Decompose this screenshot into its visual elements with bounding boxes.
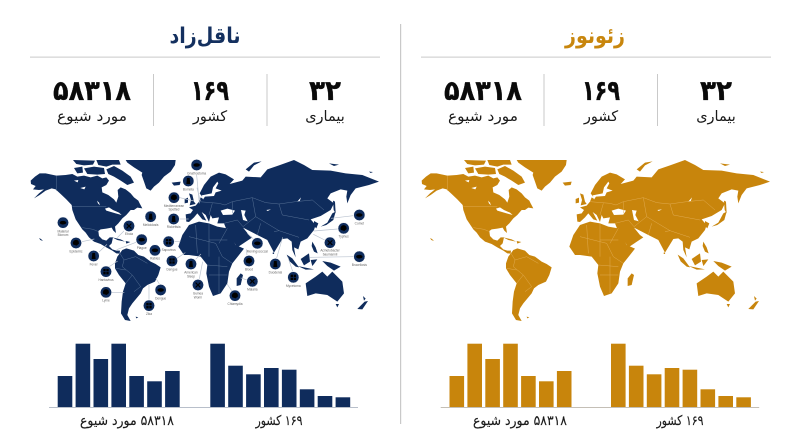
chart caption: countries zoonoses: ۱۶۹ کشور [656, 413, 704, 429]
icon: zika [143, 285, 155, 316]
icon: hantavirus: Hantavirus [98, 278, 114, 282]
icon: east 1 [331, 209, 365, 225]
heading rule right [421, 56, 771, 58]
icon: epidemic: Epidemic [70, 249, 83, 253]
icon: east 6 [243, 249, 255, 271]
icon: fever: Fever [90, 262, 98, 266]
bar chart: outbreaks zoonoses [450, 344, 572, 407]
chart baseline left [49, 407, 358, 408]
icon: lyme: Lyme [102, 299, 110, 303]
world map: zoonoses [422, 160, 770, 321]
stats: vectors: کشور [192, 109, 227, 125]
icon: east 10: Chlamydia [228, 302, 243, 306]
icon: lyme [100, 287, 124, 303]
icon: sapovirus: Sapovirus [162, 248, 176, 252]
icon: dengue: Dengue [166, 267, 178, 271]
center divider [400, 24, 401, 424]
icon: melioidosis [143, 211, 159, 227]
chart caption: outbreaks zoonoses: ۵۸۳۱۸ مورد شیوع [473, 413, 567, 429]
icon: east 3 [313, 234, 340, 257]
stats: zoonoses: ۱۶۹ [582, 74, 620, 107]
icon: malaria [57, 217, 69, 237]
icon: east 8 [286, 257, 301, 288]
stats: vectors: ۳۲ [309, 74, 341, 107]
icon: east 3: baumannii [323, 253, 338, 257]
chart baseline right [441, 407, 759, 408]
heading: zoonoses: زئونوز [564, 24, 625, 49]
icon: top [187, 159, 206, 203]
icon: epidemic [70, 237, 94, 253]
icon: dengue [166, 253, 185, 271]
icon: african sleep: American [184, 271, 198, 275]
icon: plague [117, 234, 147, 250]
icon: east 5 [247, 233, 268, 253]
icon: east 6: Blood [245, 267, 253, 271]
icon: east 4 [309, 251, 367, 267]
icon: east 4: Brucellosis [352, 263, 367, 267]
vector icons west [57, 159, 206, 316]
icon: guinea: Guinea [193, 291, 203, 295]
stats: zoonoses: مورد شیوع [448, 109, 518, 125]
icon: african sleep: Sleep [187, 274, 195, 278]
icon: mediterranean [164, 192, 194, 212]
stats: vectors: مورد شیوع [57, 109, 127, 125]
stats: vectors [53, 74, 345, 126]
icon: malaria: Malarial [57, 229, 69, 233]
icon: rickettsia: Rickettsia [167, 225, 181, 229]
icon: east 3: Acinetobacter [320, 249, 340, 253]
world map: vectors [31, 160, 379, 321]
icon: east 5: Meningococcal [247, 249, 268, 253]
icon: mediterranean: Mediterranean [164, 204, 184, 208]
icon: east 9 [241, 276, 258, 292]
panel: vectors [30, 24, 380, 429]
chart caption: outbreaks vectors: ۵۸۳۱۸ مورد شیوع [80, 413, 174, 429]
icon: dengue south: Dengue [155, 296, 166, 300]
panel: zoonoses [421, 24, 771, 429]
heading rule left [30, 56, 380, 58]
bar chart: countries vectors [210, 344, 350, 407]
stats: vectors: ۵۸۳۱۸ [53, 74, 131, 107]
icon: malaria: Bionom [58, 233, 69, 237]
icon: mediterranean: Spotted [169, 208, 180, 212]
icon: top: Gnathostoma [187, 171, 206, 175]
icon: dengue south [155, 278, 166, 300]
icon: east 9: Malaria [247, 288, 258, 292]
vector icons east [227, 209, 367, 306]
chart caption: countries vectors: ۱۶۹ کشور [255, 413, 302, 429]
bar chart: outbreaks vectors [58, 344, 180, 407]
icon: guinea: Worm [194, 295, 203, 299]
icon: east 7: Duodenal [269, 270, 282, 274]
icon: african sleep [184, 254, 201, 278]
icon: bovine [183, 175, 200, 201]
icon: east 2: Typhus [339, 235, 349, 239]
heading: vectors: ناقل‌زاد [170, 24, 240, 49]
icon: east 2 [314, 223, 349, 239]
stats: vectors: بیماری [305, 109, 345, 125]
stats: zoonoses: ۵۸۳۱۸ [444, 74, 522, 107]
stats: zoonoses: بیماری [696, 109, 736, 125]
icon: rabies [149, 245, 161, 261]
icon: fever [88, 244, 107, 266]
stats: vectors: ۱۶۹ [191, 74, 229, 107]
icon: sapovirus [162, 236, 180, 252]
icon: zika: Zika [146, 312, 152, 316]
bar chart: countries zoonoses [611, 344, 751, 407]
icon: plague: Plague [137, 246, 147, 250]
icon: east 8: Mycetoma [286, 284, 301, 288]
stats: zoonoses [444, 74, 736, 126]
icon: east 7 [269, 237, 283, 274]
icon: melioidosis: Melioidosis [143, 223, 159, 227]
icon: ebola [117, 220, 135, 238]
icon: guinea [192, 262, 204, 299]
icon: ebola: Ebola [125, 232, 133, 236]
icon: rabies: Rabies [150, 257, 160, 261]
icon: hantavirus [98, 261, 118, 282]
icon: bovine: Borrelia [183, 187, 194, 191]
icon: east 1: Comet [355, 221, 364, 225]
stats: zoonoses: کشور [583, 109, 618, 125]
icon: rickettsia [167, 213, 189, 229]
stats: zoonoses: ۳۲ [700, 74, 732, 107]
icon: east 10 [227, 284, 243, 306]
